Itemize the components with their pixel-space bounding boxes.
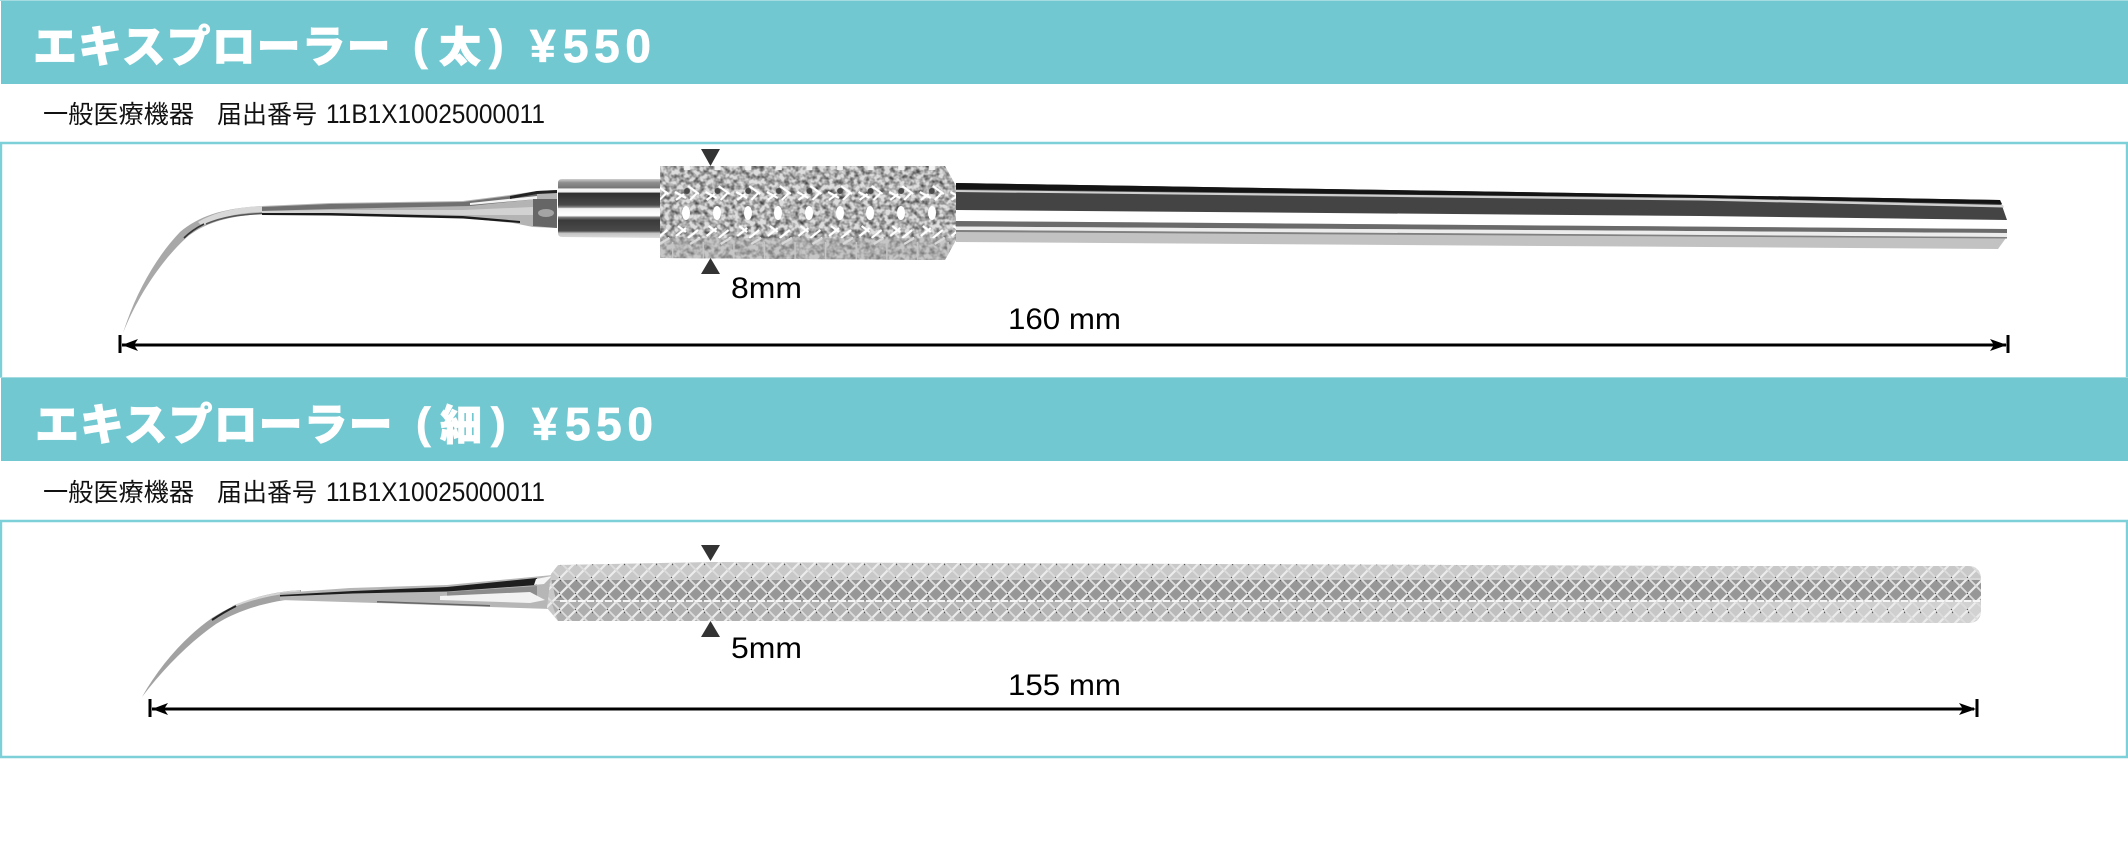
width marker: 5mm: 5mm bbox=[731, 632, 802, 665]
registration text bbox=[43, 99, 545, 129]
registration text: 一般医療機器 bbox=[43, 479, 194, 507]
heading bar: thick explorer: 太 bbox=[439, 14, 481, 75]
heading bar: thick explorer: ( bbox=[413, 21, 428, 70]
width marker: 5mm bbox=[701, 545, 802, 665]
registration text: 11B1X10025000011 bbox=[326, 99, 545, 129]
neck bbox=[262, 190, 557, 228]
heading bar: thin explorer: エキスプローラー bbox=[35, 389, 394, 453]
framed instrument area bbox=[1, 521, 2127, 757]
heading bar: thick explorer: ¥ bbox=[530, 20, 556, 72]
registration text: 届出番号 bbox=[217, 479, 317, 507]
heading bar: thick explorer: エキスプローラー bbox=[33, 11, 392, 75]
panel: thick explorer bbox=[0, 0, 2128, 377]
length arrow: 155 mm bbox=[150, 669, 1977, 717]
instrument photo: thin explorer bbox=[142, 562, 1981, 697]
collar bbox=[558, 179, 660, 238]
registration text: 届出番号 bbox=[217, 101, 317, 129]
panel: thin explorer bbox=[0, 377, 2128, 757]
knurled grip bbox=[660, 166, 956, 260]
tip bbox=[142, 590, 301, 697]
tip bbox=[123, 206, 262, 333]
heading bar: thin explorer: ¥ bbox=[532, 398, 558, 450]
registration text: 一般医療機器 bbox=[43, 101, 194, 129]
length arrow: 160 mm: 160 mm bbox=[1008, 303, 1121, 336]
registration text bbox=[43, 477, 545, 507]
width marker: 8mm: 8mm bbox=[731, 272, 802, 305]
heading bar: thin explorer: 細 bbox=[440, 392, 482, 453]
heading bar: thin explorer: 550 bbox=[565, 398, 659, 450]
heading bar: thin explorer: ( bbox=[416, 399, 431, 448]
heading bar: thick explorer: 550 bbox=[563, 20, 657, 72]
registration text: 11B1X10025000011 bbox=[326, 477, 545, 507]
heading bar: thin explorer: ) bbox=[491, 399, 506, 448]
framed instrument area bbox=[1, 143, 2127, 377]
length arrow: 155 mm: 155 mm bbox=[1008, 669, 1121, 702]
shaft bbox=[956, 183, 2007, 249]
heading bar: thin explorer bbox=[0, 377, 2128, 461]
knurled handle bbox=[547, 562, 1981, 623]
neck bbox=[280, 575, 553, 609]
heading bar: thick explorer: ) bbox=[489, 21, 504, 70]
instrument photo: thick explorer bbox=[123, 166, 2007, 333]
length arrow: 160 mm bbox=[120, 303, 2008, 353]
heading bar: thick explorer bbox=[0, 0, 2128, 84]
width marker: 8mm bbox=[701, 149, 802, 305]
